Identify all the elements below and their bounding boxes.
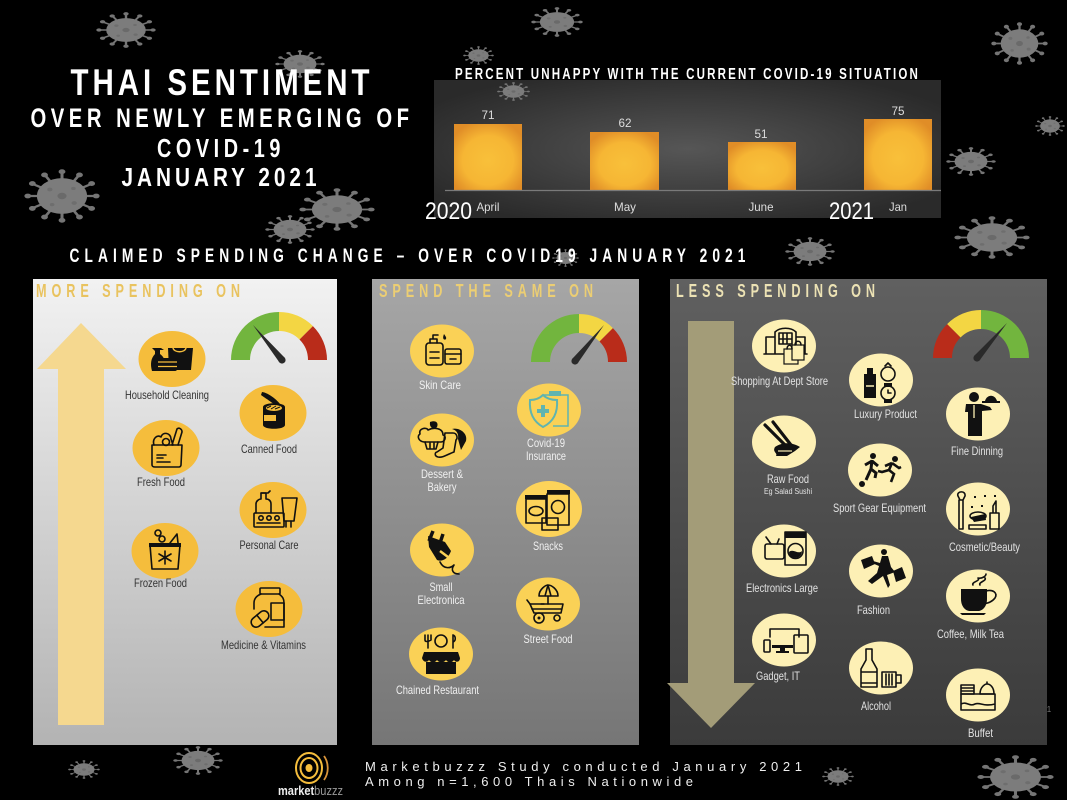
bar chart: percent unhappy: 62 <box>618 116 632 130</box>
gauge <box>933 310 1029 362</box>
item: fine dining <box>946 388 1010 458</box>
arrow up <box>37 323 126 725</box>
icon: frozen bag <box>149 530 181 569</box>
label: Household Cleaning <box>125 388 209 402</box>
item: personal care <box>240 482 306 552</box>
panel heading: MORE SPENDING ON <box>36 281 245 301</box>
item: fashion <box>849 544 913 617</box>
panel: less spending on <box>667 279 1047 745</box>
item: raw food <box>752 416 816 496</box>
label: Alcohol <box>861 699 891 713</box>
label: Fine Dinning <box>951 444 1003 458</box>
item: canned food <box>240 385 306 456</box>
bar chart: percent unhappy: 75 <box>892 104 905 118</box>
icon: coffee cup <box>960 574 996 615</box>
icon: snack bags <box>525 490 570 530</box>
label: Snacks <box>533 539 563 553</box>
panel: more spending on <box>33 279 337 745</box>
bar chart: percent unhappy: 71 <box>482 108 495 122</box>
label: Dessert & <box>421 467 463 481</box>
icon: two runners <box>859 453 901 487</box>
icon: waiter <box>965 392 1000 436</box>
label: Fresh Food <box>137 475 185 489</box>
icon: buffet table <box>961 682 995 710</box>
item: alcohol <box>849 642 913 713</box>
item: coffee, milk tea <box>937 570 1010 641</box>
label: Coffee, Milk Tea <box>937 627 1004 641</box>
item: small electronics <box>410 524 474 607</box>
icon: food cart <box>527 585 563 623</box>
item: household cleaning <box>125 331 209 402</box>
gauge <box>531 314 627 365</box>
icon: shield with cross <box>530 391 568 427</box>
logo: marketbuzzz: marketbuzzz <box>278 783 343 798</box>
bar chart: percent unhappy: 2021 <box>829 198 874 225</box>
panel heading: LESS SPENDING ON <box>676 281 880 301</box>
arrow down <box>667 321 755 728</box>
label: Bakery <box>428 480 456 494</box>
label: Cosmetic/Beauty <box>949 540 1020 554</box>
logo: marketbuzzz <box>278 753 343 798</box>
label: Skin Care <box>419 378 461 392</box>
icon: cosmetics <box>958 492 999 529</box>
label <box>526 436 566 463</box>
item: shopping at dept store <box>731 320 828 388</box>
page number: 1 <box>1047 705 1052 714</box>
icon: grocery bag <box>152 428 182 467</box>
item: electronics large <box>746 524 818 595</box>
icon: perfume, ring and watch <box>864 363 895 403</box>
item: snacks <box>516 481 582 553</box>
item: buffet <box>946 668 1010 740</box>
label: Buffet <box>968 726 994 740</box>
label: Electronica <box>418 593 465 607</box>
icon: cleaning products <box>151 348 193 371</box>
item: chained restaurant <box>396 628 480 697</box>
label: Fashion <box>857 603 890 617</box>
bar chart: percent unhappy <box>425 66 941 225</box>
gauge <box>231 312 327 364</box>
icon: tv and washer <box>765 532 806 565</box>
label: Eg Salad Sushi <box>764 487 812 496</box>
label <box>418 580 465 607</box>
panel: spend the same on <box>372 279 639 745</box>
item: frozen food <box>132 523 198 590</box>
label <box>764 472 812 496</box>
bar chart: percent unhappy: Jan <box>889 200 907 214</box>
footer note: Marketbuzzz Study conducted January 2021 <box>365 759 806 774</box>
title: COVID-19 <box>157 133 285 163</box>
icon: department store <box>764 328 807 364</box>
icon: cupcake and bread <box>418 421 466 457</box>
item: covid-19 insurance <box>517 384 581 463</box>
bar chart: percent unhappy: May <box>614 200 636 214</box>
label: Frozen Food <box>134 576 187 590</box>
chart background panel <box>434 80 941 218</box>
label: Street Food <box>524 632 572 646</box>
label: Raw Food <box>767 472 809 486</box>
panel heading: SPEND THE SAME ON <box>379 281 598 301</box>
title: OVER NEWLY EMERGING OF <box>30 103 414 133</box>
label: Canned Food <box>241 442 297 456</box>
title: JANUARY 2021 <box>122 162 320 192</box>
label: Small <box>430 580 452 594</box>
label: Electronics Large <box>746 581 818 595</box>
label: Gadget, IT <box>756 669 801 683</box>
icon: medicine bottle <box>249 588 284 629</box>
title: THAI SENTIMENT <box>70 62 374 103</box>
bar chart: percent unhappy: 2020 <box>425 198 472 225</box>
icon: plug <box>428 531 459 574</box>
icon: skin care <box>426 334 461 365</box>
footer note: Among n=1,600 Thais Nationwide <box>365 774 697 789</box>
item: luxury product <box>849 354 918 421</box>
label: Sport Gear Equipment <box>833 501 927 515</box>
item: gadget, it <box>752 614 816 683</box>
label: Personal Care <box>240 538 299 552</box>
icon: woman with shopping bags <box>861 549 906 588</box>
title <box>30 62 414 192</box>
item: skin care <box>410 324 474 392</box>
label: Shopping At Dept Store <box>731 374 828 388</box>
item: medicine and vitamins <box>221 581 306 652</box>
item: fresh food <box>132 420 200 489</box>
icon: can <box>261 392 285 429</box>
label <box>421 467 463 494</box>
section heading: CLAIMED SPENDING CHANGE – OVER COVID19 JANUARY 2021 <box>70 246 750 267</box>
icon: chopsticks <box>765 422 800 456</box>
item: street food <box>516 578 580 646</box>
item: cosmetic beauty <box>946 482 1020 554</box>
label: Chained Restaurant <box>396 683 480 697</box>
footer note <box>365 759 806 789</box>
label: Covid-19 <box>527 436 565 450</box>
icon: devices <box>764 629 808 653</box>
item: sport gear equipment <box>833 444 927 515</box>
bar chart: percent unhappy: June <box>748 200 774 214</box>
bar chart: percent unhappy: 51 <box>754 127 768 141</box>
label: Insurance <box>526 449 566 463</box>
icon: personal care products <box>254 491 297 527</box>
icon: beer bottle and mug <box>861 649 901 687</box>
icon: restaurant <box>422 635 460 674</box>
bar chart: percent unhappy: April <box>476 200 500 214</box>
item: dessert and bakery <box>410 414 474 494</box>
label: Medicine & Vitamins <box>221 638 306 652</box>
label: Luxury Product <box>854 407 918 421</box>
